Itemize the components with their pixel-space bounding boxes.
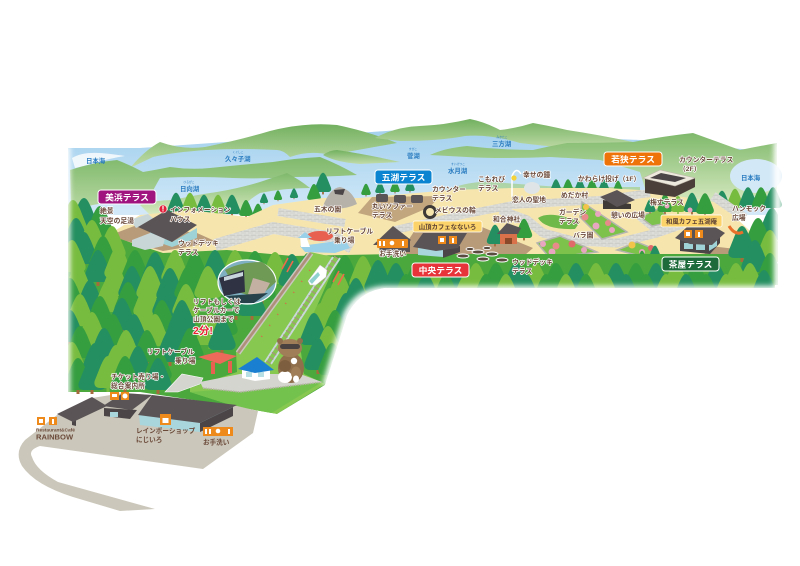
- map labels: テラス: [432, 194, 452, 202]
- map labels: カウンター: [432, 184, 466, 194]
- map labels: RAINBOW: [36, 432, 74, 442]
- badge: summit cafe nanairo: [413, 221, 482, 232]
- map labels: ウッドデッキ: [178, 238, 219, 248]
- icons: summit cafe: [438, 236, 457, 244]
- water labels: 日本海: [86, 156, 106, 165]
- badge: mihama terrace: 美浜テラス: [105, 192, 149, 202]
- badge: chuo terrace: [412, 263, 469, 277]
- water labels: 日向湖: [180, 184, 200, 193]
- map labels: こもれび: [478, 174, 505, 184]
- building: rest plaza: [600, 190, 635, 209]
- badge: mihama terrace: [98, 190, 156, 204]
- icon: mobius ring: [424, 206, 436, 218]
- photo circle: [218, 260, 276, 304]
- deck: left: [108, 225, 217, 251]
- cable car track: [265, 257, 340, 364]
- map labels: 和合神社: [493, 214, 520, 224]
- map labels: テラス: [512, 268, 532, 276]
- icons: toilets: [377, 239, 408, 248]
- icons: ticket and info: [110, 392, 129, 400]
- parking area and road: [19, 393, 258, 511]
- icons: lower toilets: [203, 427, 233, 436]
- map labels: テラス: [372, 212, 392, 220]
- deck: centre: [400, 225, 533, 268]
- deck seats: [457, 246, 508, 262]
- hammock: [729, 226, 743, 233]
- badge: wakasa terrace: [604, 152, 662, 166]
- map labels: お手洗い: [379, 249, 406, 258]
- map labels: テラス: [178, 248, 198, 256]
- map labels: 乗り場: [175, 356, 196, 365]
- building: summit cafe: [413, 233, 467, 258]
- map labels: 恋人の聖地: [512, 195, 546, 204]
- sofa seats: [376, 194, 423, 203]
- badge: chuo terrace: 中央テラス: [419, 264, 463, 276]
- mountains: [70, 119, 782, 240]
- icons: restaurant: [37, 417, 57, 425]
- blue-roof hut: [238, 357, 274, 381]
- sea and lakes: [68, 130, 775, 215]
- water labels: くぐしこ: [232, 150, 244, 154]
- map labels: リフトケーブル: [147, 347, 194, 356]
- map labels: インフォメーション: [170, 206, 231, 214]
- map labels: 五木の園: [314, 204, 341, 214]
- building: rainbow shop: [138, 395, 237, 432]
- map labels: ウッドデッキ: [512, 258, 553, 266]
- lift station: [298, 231, 350, 253]
- building: chaya terrace cafe: [675, 227, 725, 254]
- building: toilets: [373, 226, 411, 252]
- water labels: 久々子湖: [225, 154, 251, 163]
- map labels: リフトケーブル: [326, 226, 373, 236]
- dome: goboku garden: [323, 187, 357, 209]
- water labels: 日本海: [741, 173, 761, 182]
- stone paths: [215, 193, 745, 248]
- paved plaza: [165, 374, 322, 392]
- map labels: 丸いソファー: [372, 202, 413, 210]
- hedge: bairyo terrace trees: [645, 193, 714, 217]
- map labels: 総合案内所: [111, 381, 145, 390]
- map labels: チケット売り場・: [111, 372, 165, 381]
- water labels: みかたこ: [496, 135, 508, 139]
- water labels: 菅湖: [407, 151, 420, 160]
- badge: wakasa terrace: 若狭テラス: [611, 154, 655, 164]
- bell of happiness: [511, 170, 540, 197]
- map labels: 憩いの広場: [611, 210, 645, 220]
- water labels: 三方湖: [492, 139, 512, 148]
- badge: wafu cafe gokoan: [661, 215, 722, 227]
- map labels: かわらけ投げ（1F）: [578, 174, 640, 183]
- map labels: （2F）: [679, 165, 701, 173]
- icons: chaya cafe: [684, 230, 703, 238]
- map labels: テラス: [559, 218, 579, 226]
- cable car: [308, 265, 327, 285]
- map labels: ケーブルカーで: [193, 306, 240, 314]
- map labels: テラス: [478, 184, 498, 192]
- map labels: Restaurant&Café: [36, 428, 75, 434]
- water labels: すがこ: [409, 147, 417, 151]
- badge: summit cafe nanairo: 山頂カフェなないろ: [419, 222, 476, 231]
- forest strip right: [383, 208, 778, 288]
- mountain slope lawn: [190, 252, 338, 414]
- map labels: ハンモック: [732, 204, 766, 213]
- water labels: すいげつこ: [451, 162, 465, 166]
- tanuki mascot: [277, 338, 304, 383]
- map labels: リフトもしくは: [193, 298, 241, 306]
- map labels: めだか村: [561, 190, 588, 200]
- building: wakasa terrace: [643, 170, 695, 197]
- map labels: バラ園: [573, 232, 594, 240]
- badge: wafu cafe gokoan: 和風カフェ五湖庵: [666, 216, 718, 226]
- map labels: お手洗い: [203, 438, 230, 446]
- deck: right: [695, 246, 762, 268]
- red gate: [198, 352, 237, 374]
- map labels: 幸せの鐘: [523, 170, 550, 179]
- water labels: ひるがこ: [183, 180, 195, 184]
- lift track: [238, 253, 311, 353]
- lift arrows: [282, 258, 344, 285]
- map labels: 2分!: [193, 324, 213, 337]
- water labels: [86, 135, 761, 193]
- badge: chaya terrace: 茶屋テラス: [669, 258, 713, 270]
- forest: [56, 198, 786, 414]
- building: shrine: [487, 219, 532, 246]
- map labels: ハウス: [170, 214, 191, 224]
- map labels: 梅丈テラス: [650, 198, 684, 206]
- map labels: メビウスの輪: [435, 206, 476, 214]
- badge: goko terrace: [375, 170, 432, 184]
- map labels: レインボーショップ: [136, 426, 196, 435]
- map labels: カウンターテラス: [679, 155, 733, 164]
- map labels: にじいろ: [136, 436, 162, 444]
- badge: goko terrace: 五湖テラス: [382, 172, 426, 182]
- ground: [108, 188, 763, 275]
- gardens: [537, 202, 672, 263]
- right forest trees: [300, 255, 392, 379]
- map labels: 広場: [732, 213, 746, 222]
- badge: chaya terrace: [662, 257, 719, 271]
- building: ticket office: [103, 393, 152, 419]
- icon: information: [159, 205, 167, 213]
- soft map edges: [66, 140, 778, 396]
- map labels: 天空の足湯: [100, 216, 134, 225]
- shop buildings: [57, 393, 237, 432]
- building: restaurant rainbow: [57, 397, 107, 426]
- map labels: 山頂公園まで: [193, 314, 234, 324]
- water labels: 水月湖: [448, 166, 468, 175]
- map labels: 乗り場: [334, 236, 355, 244]
- icon: shop bag: [160, 414, 171, 425]
- building: miharu information house: [130, 210, 197, 250]
- map labels: 絶景: [100, 206, 114, 215]
- map labels: [36, 155, 766, 446]
- small background trees: [168, 173, 782, 220]
- deck: sofa terrace: [358, 196, 440, 222]
- map labels: ガーデン: [559, 208, 586, 216]
